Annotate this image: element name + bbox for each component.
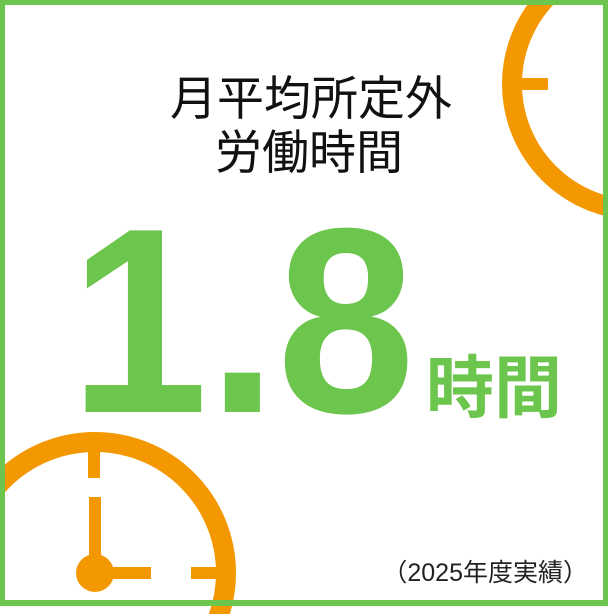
- icon: top-right clock: [512, 0, 608, 210]
- icon: bottom-left clock: [0, 442, 226, 614]
- title: [170, 72, 452, 179]
- title: 月平均所定外: [170, 72, 452, 125]
- title: 労働時間: [215, 126, 403, 179]
- unit: 時間: 時間: [426, 351, 562, 427]
- big number 1.8: 1.8: [70, 173, 415, 468]
- note: fiscal year: （2025年度実績）: [382, 559, 588, 587]
